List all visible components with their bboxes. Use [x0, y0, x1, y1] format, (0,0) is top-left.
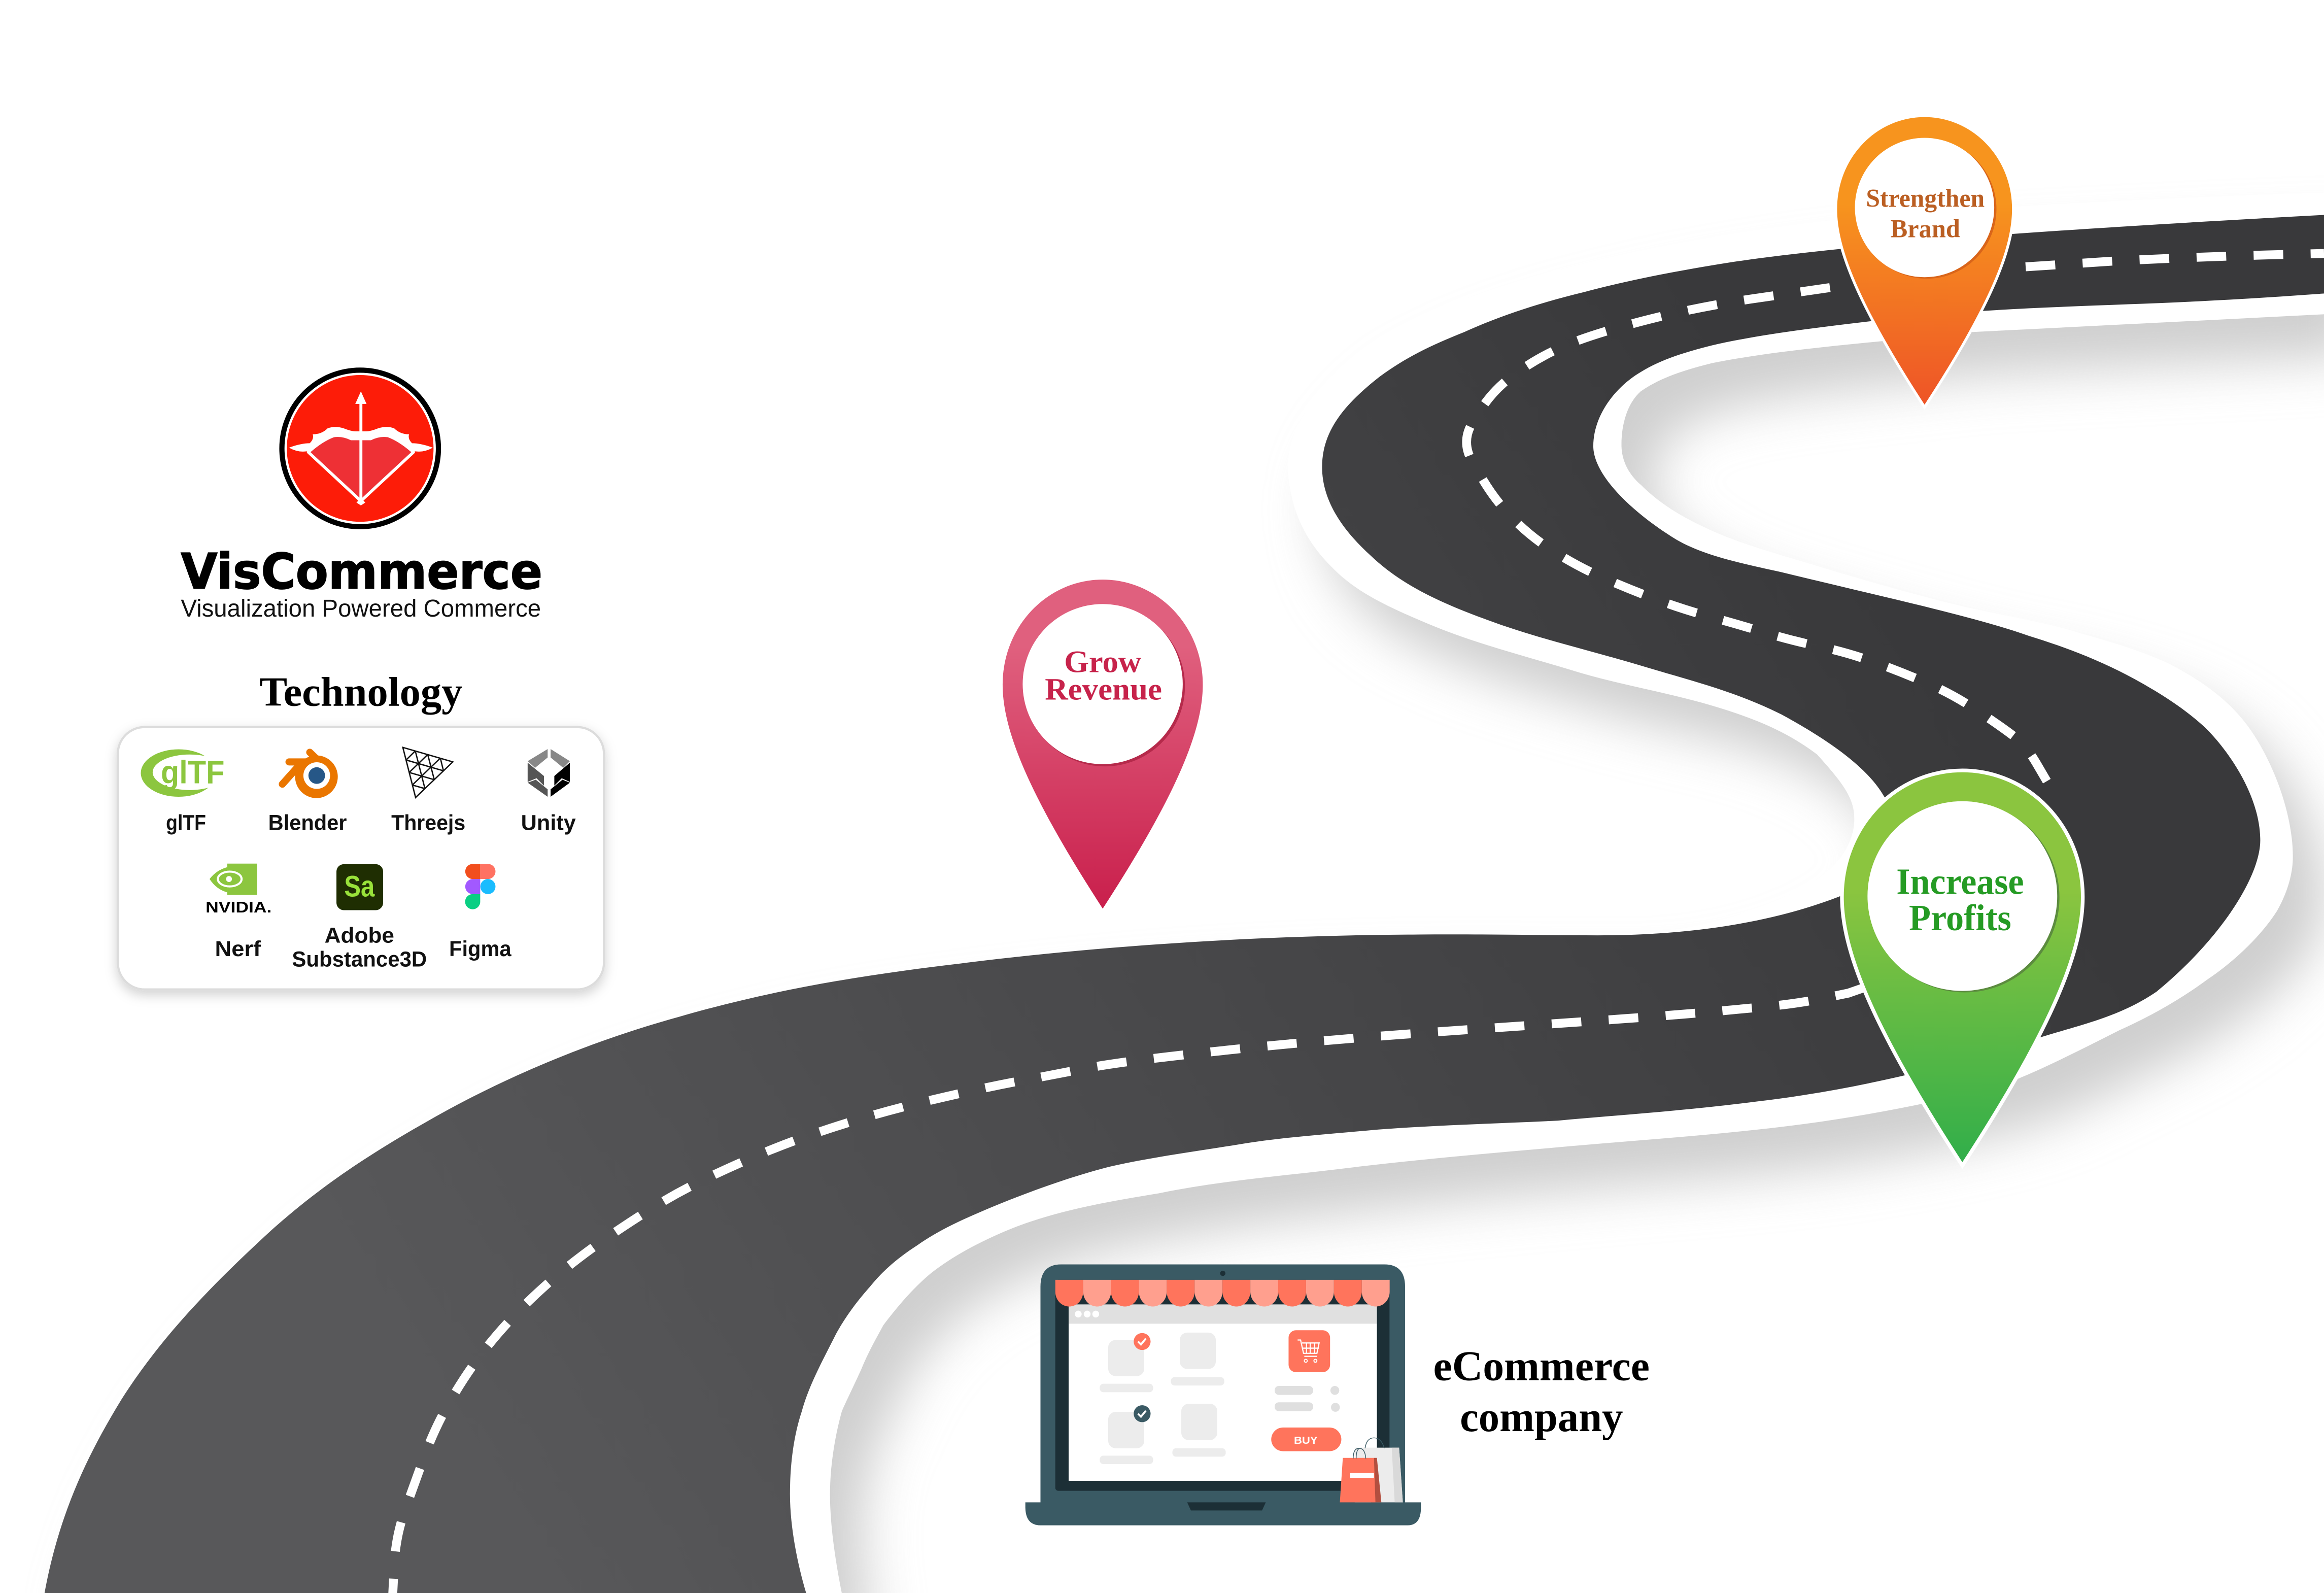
label: Blender: Blender [268, 811, 347, 835]
label: Threejs: Threejs [391, 811, 465, 835]
brand name: VisCommerce [181, 544, 542, 600]
heading: technology: Technology [259, 668, 462, 715]
label: eCommerce company: eCommerce [1433, 1343, 1650, 1389]
label: eCommerce company [1433, 1343, 1650, 1441]
label: Figma: Figma [449, 937, 511, 961]
pin: strengthen brand: Strengthen [1866, 184, 1985, 213]
icon: Blender [282, 752, 338, 798]
awning [1055, 1280, 1390, 1307]
label: Nerf: Nerf [215, 937, 261, 961]
detail rows [1275, 1386, 1340, 1412]
pin: grow revenue: Revenue [1045, 672, 1162, 707]
buy button: BUY [1294, 1435, 1318, 1446]
icon: glTF [141, 750, 227, 797]
pin: increase profits [1844, 772, 2081, 1162]
label: Adobe Substance3D [292, 924, 427, 971]
icon: glTF: glTF [161, 754, 225, 791]
laptop screen [1055, 1280, 1389, 1491]
icon: NVIDIA: NVIDIA. [206, 898, 271, 916]
label: glTF: glTF [166, 811, 206, 835]
panel: technology [118, 727, 604, 990]
icon: Figma [465, 864, 495, 909]
label: eCommerce company: company [1460, 1394, 1623, 1441]
pin: grow revenue [1003, 580, 1203, 908]
laptop illustration [1026, 1265, 1421, 1526]
label: Adobe Substance3D: Substance3D [292, 947, 427, 971]
store page [1069, 1304, 1377, 1481]
pin: increase profits: Profits [1909, 897, 2011, 938]
laptop base [1026, 1502, 1421, 1526]
icon: Unity [528, 749, 570, 797]
pin: increase profits: Increase [1896, 861, 2024, 902]
pin: strengthen brand [1837, 117, 2012, 404]
icon: NVIDIA [206, 864, 271, 916]
logo icon [282, 370, 438, 527]
icon: shopping bags [1340, 1438, 1403, 1502]
icon: Threejs [403, 748, 453, 797]
buy button [1271, 1428, 1341, 1451]
icon: Substance 3D: Sa [344, 870, 375, 903]
label: Adobe Substance3D: Adobe [325, 924, 394, 947]
icon: Substance 3D [336, 864, 383, 910]
icon: cart button [1288, 1330, 1330, 1372]
pin: grow revenue: Grow [1064, 645, 1141, 680]
pin: strengthen brand: Brand [1891, 214, 1960, 243]
label: Unity: Unity [521, 811, 576, 835]
laptop body [1040, 1265, 1405, 1505]
tagline: Visualization Powered Commerce [181, 595, 541, 622]
